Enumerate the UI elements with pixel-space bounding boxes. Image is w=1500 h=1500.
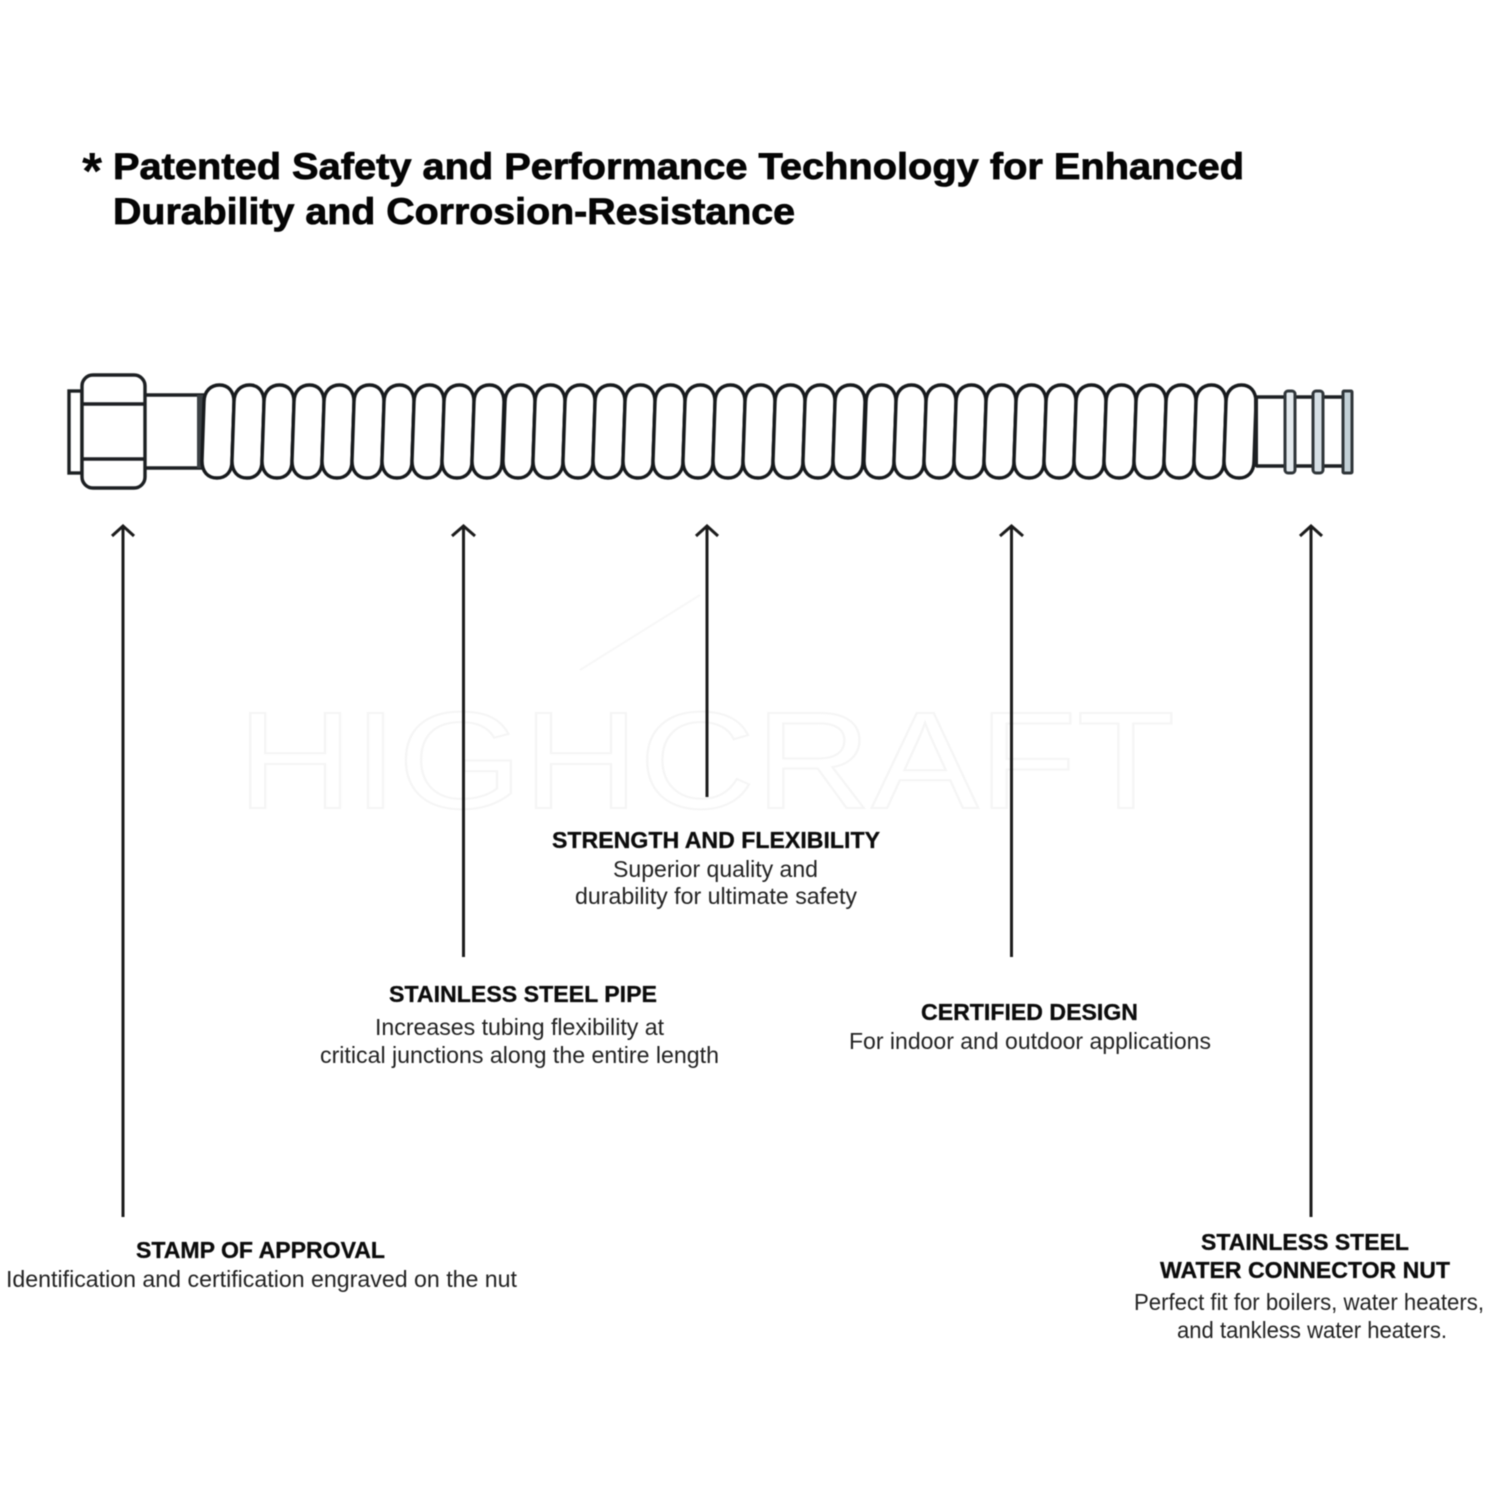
title asterisk: *	[82, 143, 103, 201]
callout: strength and flexibility: STRENGTH AND FLEXIBILITY	[552, 827, 880, 853]
callout: strength and flexibility	[552, 827, 880, 909]
hose: neck	[145, 395, 204, 468]
callout: water connector nut: WATER CONNECTOR NUT	[1160, 1257, 1450, 1283]
callout: stainless steel pipe: STAINLESS STEEL PIPE	[389, 981, 657, 1007]
arrow: water connector nut	[1300, 526, 1322, 1217]
callout: stainless steel pipe	[320, 981, 719, 1068]
watermark	[237, 595, 1175, 838]
callout: certified design	[849, 999, 1211, 1054]
hose: left flange	[69, 391, 82, 473]
title line 1: Patented Safety and Performance Technology for Enhanced	[113, 146, 1244, 187]
title line 2: Durability and Corrosion-Resistance	[113, 191, 795, 232]
hose: hex nut	[82, 375, 145, 488]
callout: stamp of approval	[6, 1237, 518, 1292]
callout: water connector nut: and tankless water heaters.	[1177, 1317, 1447, 1343]
callout: stainless steel pipe: Increases tubing flexibility at	[375, 1014, 665, 1040]
arrow: strength and flexibility	[696, 526, 718, 797]
watermark: HIGHCRAFT	[237, 684, 1175, 838]
callout: water connector nut: Perfect fit for boilers, water heaters,	[1134, 1289, 1484, 1315]
callout: stamp of approval: Identification and certification engraved on the nut	[6, 1266, 518, 1292]
title	[82, 143, 1244, 232]
arrow: stainless steel pipe	[452, 526, 475, 957]
callout: water connector nut: STAINLESS STEEL	[1201, 1229, 1409, 1255]
callout: stamp of approval: STAMP OF APPROVAL	[136, 1237, 385, 1263]
callout: stainless steel pipe: critical junctions along the entire length	[320, 1042, 719, 1068]
hose diagram	[69, 375, 1352, 488]
callout: strength and flexibility: durability for ultimate safety	[575, 883, 858, 909]
hose: right connector	[1254, 391, 1352, 473]
callout: strength and flexibility: Superior quality and	[613, 856, 818, 882]
callout: certified design: For indoor and outdoor applications	[849, 1028, 1211, 1054]
arrow: certified design	[1000, 526, 1023, 957]
arrow: stamp of approval	[112, 526, 134, 1217]
hose: corrugated coils	[202, 385, 1256, 478]
callout: certified design: CERTIFIED DESIGN	[921, 999, 1138, 1025]
callout: water connector nut	[1134, 1229, 1484, 1343]
